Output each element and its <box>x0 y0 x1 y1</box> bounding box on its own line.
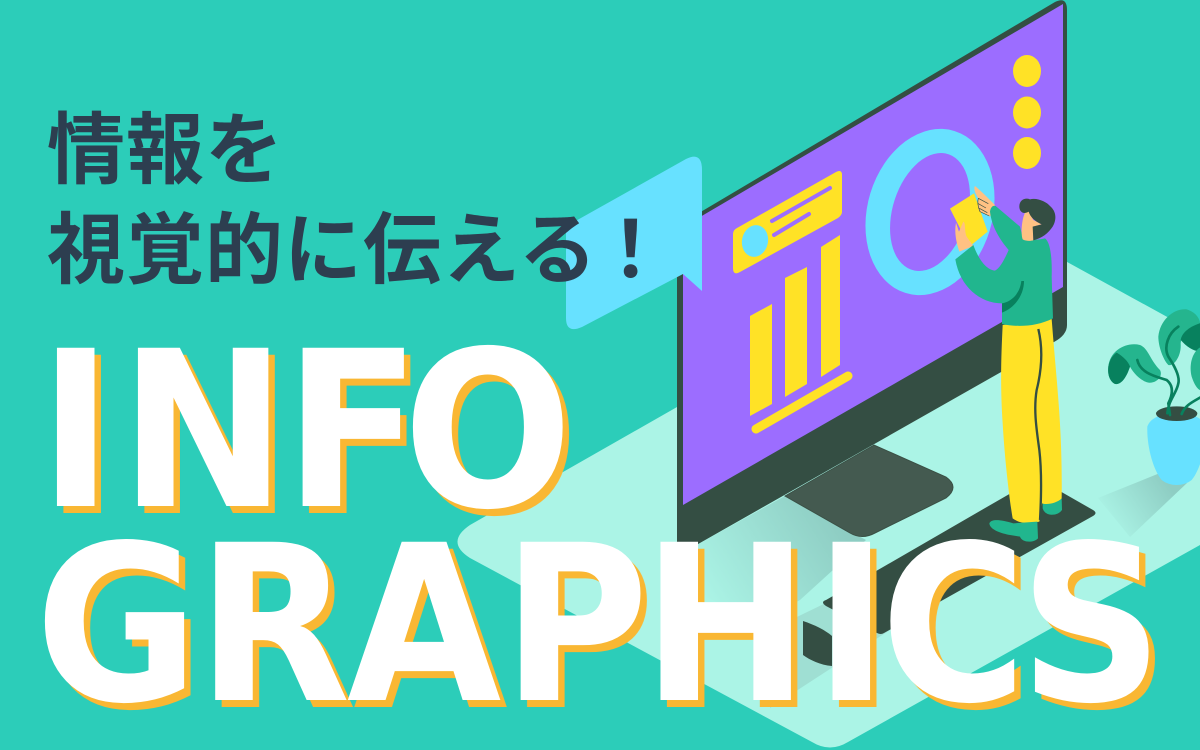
back shoe <box>1043 498 1062 515</box>
trousers <box>1001 319 1062 523</box>
monitor <box>677 0 1067 556</box>
monitor screen <box>683 4 1063 505</box>
speech bubble <box>566 157 702 329</box>
plant stems <box>1137 327 1200 415</box>
monitor foot <box>803 621 832 666</box>
person <box>950 186 1062 542</box>
heading: japanese line 2: 視覚的に伝える！ <box>47 206 671 294</box>
monitor stand base <box>785 445 953 536</box>
monitor frame <box>677 0 1067 556</box>
yellow card <box>733 171 842 273</box>
ring chart <box>865 116 995 308</box>
upper leaf <box>1158 309 1200 365</box>
sleeve shade <box>1002 281 1024 313</box>
mat shadow <box>770 600 890 708</box>
pot opening <box>1156 406 1197 421</box>
front shoe <box>989 520 1038 542</box>
stand shadow <box>677 496 866 622</box>
left leaf <box>1108 344 1161 384</box>
upper leaf fold <box>1181 323 1200 352</box>
heading: japanese line 1: 情報を <box>47 106 284 194</box>
bar chart <box>750 235 848 429</box>
three dots <box>1013 55 1041 169</box>
plant shadow <box>1098 473 1187 537</box>
potted plant <box>1108 309 1200 485</box>
title: INFO: INFO <box>39 305 573 558</box>
floor mat <box>823 478 1096 634</box>
face <box>1022 212 1042 241</box>
lower hand <box>955 222 973 252</box>
pot <box>1147 413 1200 485</box>
paper sheet <box>950 193 988 247</box>
right leaf <box>1191 347 1200 391</box>
trouser stripe <box>1035 329 1041 520</box>
title: GRAPHICS: GRAPHICS <box>35 499 1163 750</box>
left leaf fold <box>1108 353 1130 384</box>
hair <box>1019 199 1055 240</box>
green sweater <box>955 206 1053 326</box>
isometric floor <box>458 224 1200 748</box>
pointing hand <box>974 186 995 217</box>
